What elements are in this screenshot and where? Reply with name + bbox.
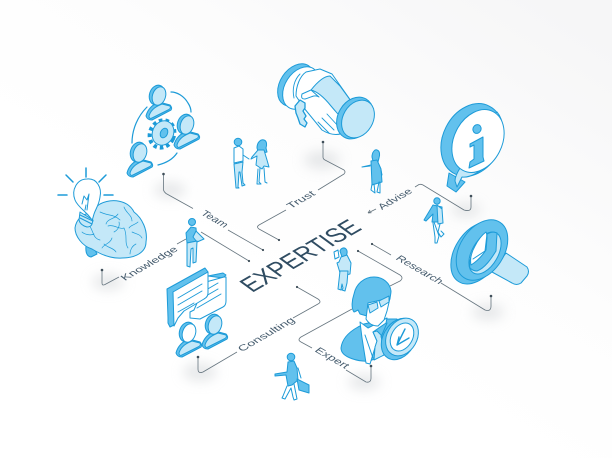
back bubble xyxy=(208,273,226,278)
front bubble xyxy=(167,268,208,327)
icon: light bulb and brain xyxy=(58,168,146,258)
label: Knowledge: Knowledge xyxy=(118,245,181,283)
person: advise woman xyxy=(362,150,382,193)
person right xyxy=(174,112,200,149)
person top xyxy=(146,83,172,120)
person: reading woman xyxy=(334,248,351,291)
person: businessman walking xyxy=(275,353,309,400)
icon: expert with check badge xyxy=(341,277,425,366)
icon: team with gear xyxy=(127,83,200,177)
icon: handshake xyxy=(270,57,381,146)
person: handshake woman xyxy=(251,140,269,184)
icon: info bubble xyxy=(429,93,515,192)
connector lines xyxy=(101,141,492,382)
icon: speech bubbles and people xyxy=(167,268,228,357)
person: handshake man xyxy=(234,138,249,188)
person lower left xyxy=(176,320,202,357)
label: Research: Research xyxy=(393,254,446,286)
icon: magnifier xyxy=(440,210,528,293)
title: EXPERTISE: EXPERTISE xyxy=(234,216,368,297)
person: Knowledge reader xyxy=(186,218,204,267)
floor shadows xyxy=(92,151,504,390)
label: Expert: Expert xyxy=(312,346,352,371)
person left xyxy=(127,140,153,177)
label: Consulting: Consulting xyxy=(235,316,298,354)
gear xyxy=(145,116,179,152)
person lower right xyxy=(202,312,228,349)
label: Advise: Advise xyxy=(375,187,416,212)
person: walking woman xyxy=(424,198,444,243)
label: Team: Team xyxy=(198,209,231,230)
label: Trust: Trust xyxy=(284,189,318,211)
